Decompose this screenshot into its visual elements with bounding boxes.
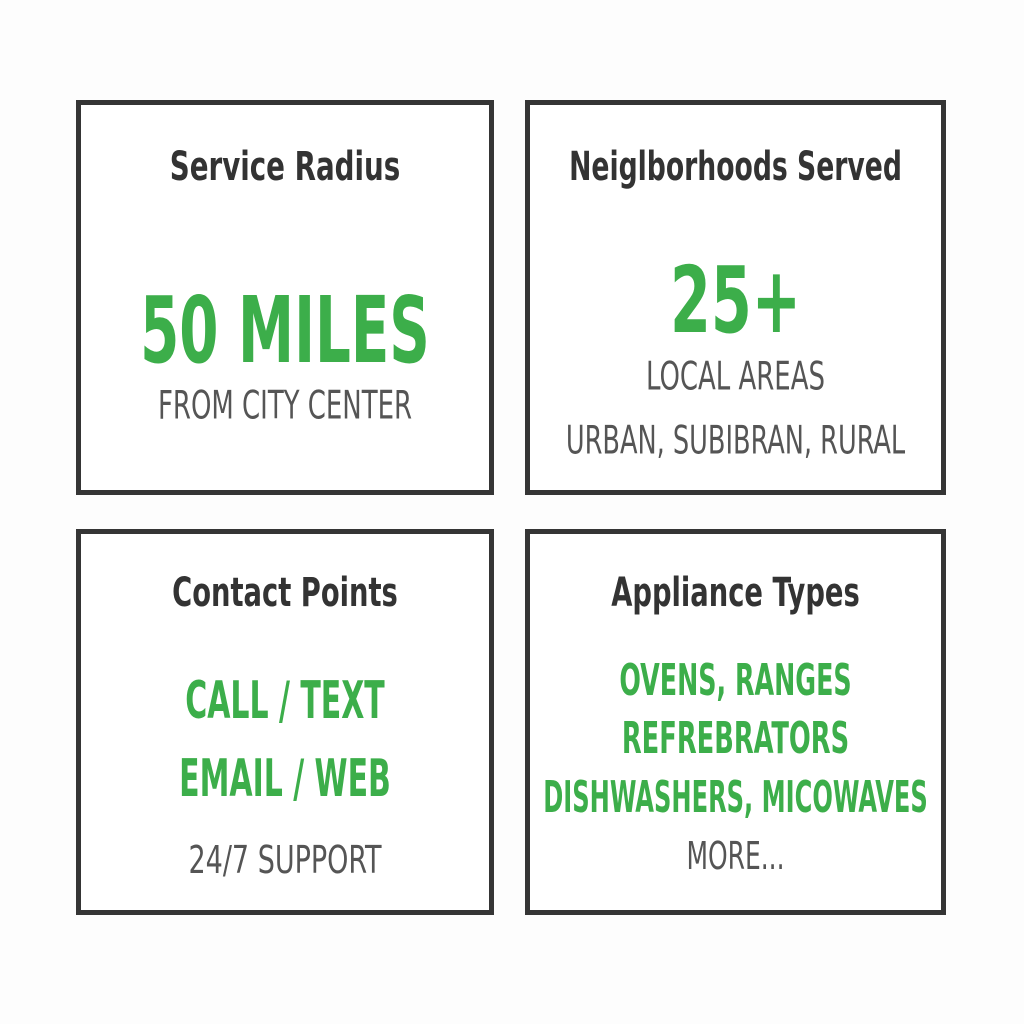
heading: contact points: Contact Points bbox=[172, 570, 398, 616]
text: from city center: FROM CITY CENTER bbox=[158, 384, 412, 428]
stat: 25+: 25+ bbox=[670, 247, 801, 354]
panel: contact points bbox=[76, 529, 494, 915]
text: urban suburban rural: URBAN, SUBIBRAN, RURAL bbox=[566, 418, 905, 464]
panel: neighborhoods served bbox=[525, 100, 946, 495]
panel: appliance types bbox=[525, 529, 946, 915]
text: email web: EMAIL / WEB bbox=[179, 749, 391, 809]
stat: 50 miles: 50 MILES bbox=[140, 277, 430, 384]
text: call text: CALL / TEXT bbox=[185, 671, 385, 731]
text: refrigerators: REFREBRATORS bbox=[622, 713, 849, 764]
heading: service radius: Service Radius bbox=[170, 144, 400, 190]
heading: appliance types: Appliance Types bbox=[611, 570, 860, 616]
heading: neighborhoods served: Neiglborhoods Served bbox=[569, 144, 902, 190]
text: ovens ranges: OVENS, RANGES bbox=[619, 655, 852, 706]
text: 24/7 support: 24/7 SUPPORT bbox=[188, 838, 382, 882]
text: more: MORE... bbox=[686, 834, 785, 878]
text: dishwashers microwaves: DISHWASHERS, MICOWAVES bbox=[543, 772, 928, 823]
panel: service radius bbox=[76, 100, 494, 495]
text: local areas: LOCAL AREAS bbox=[646, 354, 825, 400]
